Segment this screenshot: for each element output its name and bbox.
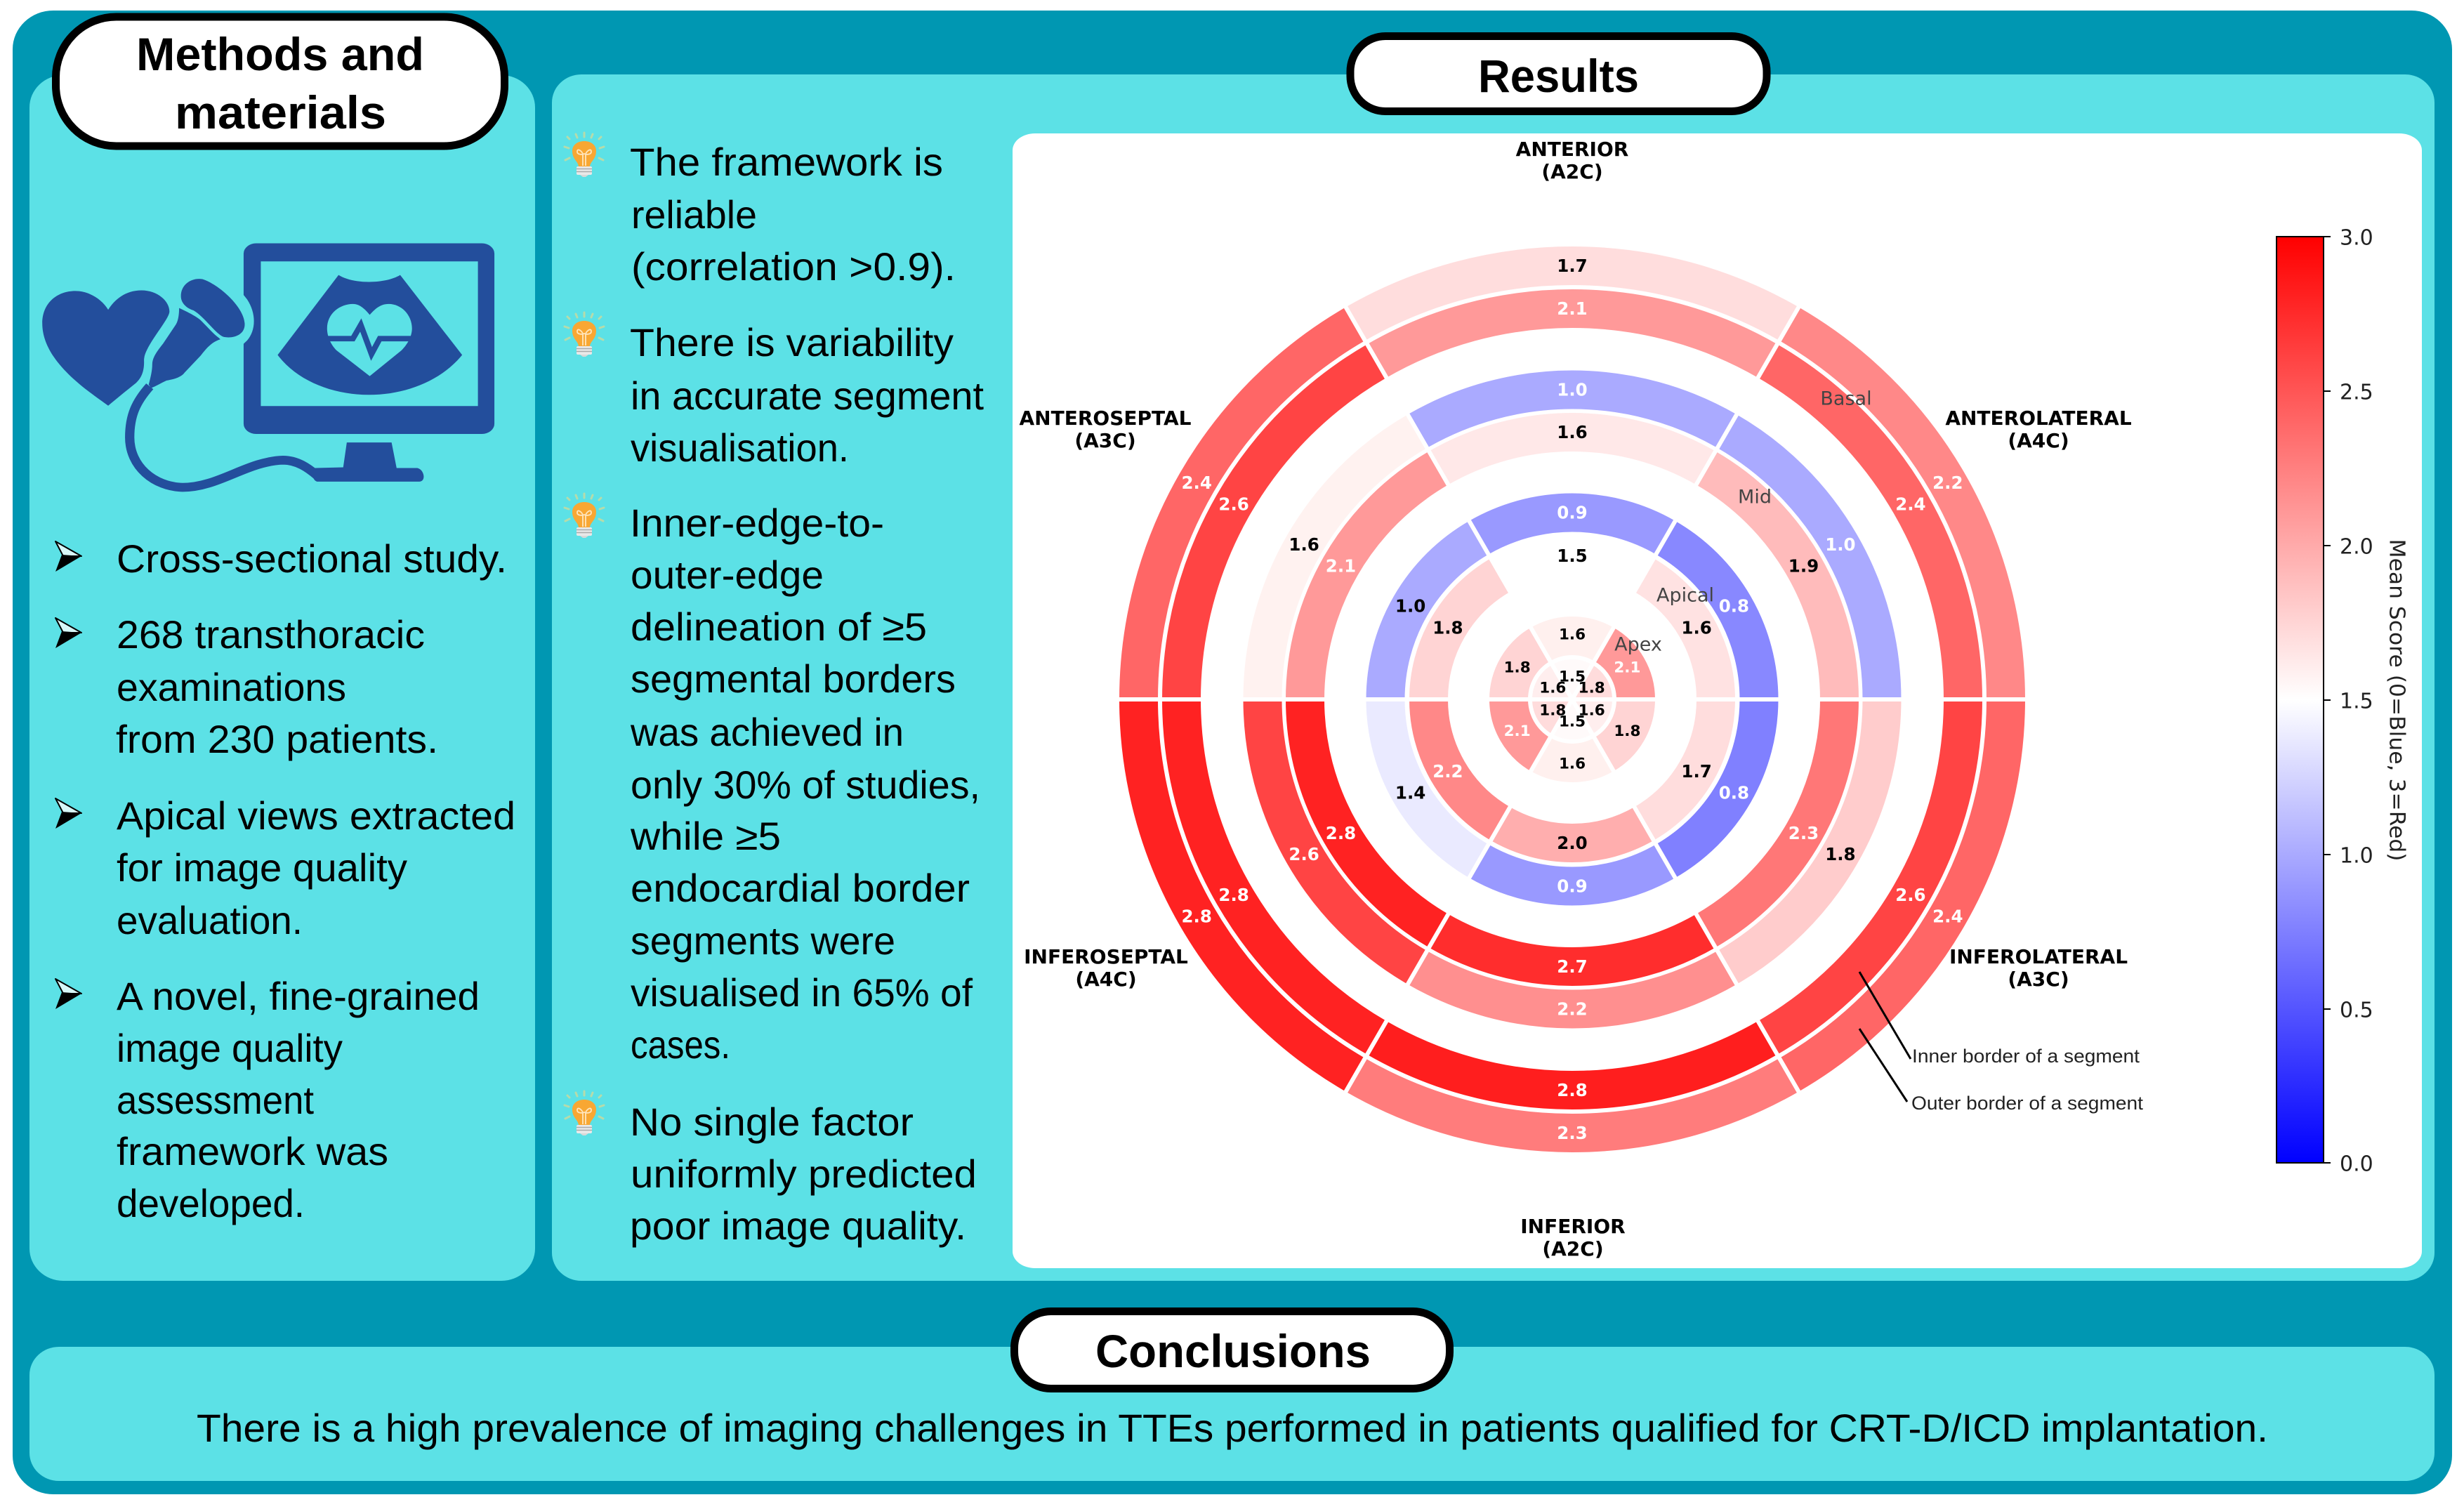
label: anterior: (A2C) [1541,160,1603,183]
text block: delineation finding: outer-edge [631,553,824,597]
text block: delineation finding: endocardial border [631,866,970,910]
ring: mid outer border [1227,390,1918,1009]
values: basal segments: 2.4 [1895,494,1926,514]
values: apical segments: 1.6 [1681,617,1712,638]
values: mid segments: 2.2 [1557,999,1588,1020]
values: apical segments [1395,503,1749,896]
panel: methods and materials [29,17,535,1281]
label: anteroseptal: ANTEROSEPTAL [1020,407,1192,430]
values: apex segments: 1.6 [1559,626,1586,643]
callout: inner border of a segment: Inner border of a segment [1912,1046,2140,1067]
label: inferoseptal: INFEROSEPTAL [1024,945,1188,968]
values: apical segments: 0.9 [1557,503,1588,522]
values: mid segments: 2.7 [1557,956,1588,977]
values: apex segments: 1.5 [1559,668,1586,685]
values: apical segments: 1.7 [1681,761,1712,782]
label: anterior: ANTERIOR [1516,138,1628,161]
label: basal: Basal [1820,388,1872,410]
label: anteroseptal: (A3C) [1074,429,1136,452]
label: inferolateral: INFEROLATERAL [1949,945,2128,968]
values: apical segments: 1.5 [1557,546,1588,566]
bullet: examinations: examinations [117,665,346,709]
callout: outer border of a segment [1859,1029,2144,1114]
label: inferior [1520,1215,1626,1260]
panel: results [552,37,2435,1281]
values: apex segments: 1.6 [1579,702,1605,719]
text block: reliability finding: reliable [631,192,757,237]
text block: delineation finding: while ≥5 [630,814,781,858]
colorbar legend: 2.0 [2340,535,2373,559]
label: apical: Apical [1656,584,1714,607]
values: apex segments: 2.1 [1614,659,1640,676]
values: mid segments: 2.1 [1326,555,1356,576]
values: basal segments [1181,256,1963,1143]
values: apical segments: 0.8 [1719,782,1749,803]
values: basal segments: 2.8 [1218,885,1249,905]
values: basal segments: 2.4 [1181,473,1212,493]
colorbar legend: 1.5 [2340,690,2373,713]
text block: delineation finding: Inner-edge-to- [630,501,884,545]
colorbar legend: 2.5 [2340,381,2373,404]
callout: inner border of a segment [1859,972,2140,1067]
values: apex segments: 1.8 [1614,723,1640,740]
colorbar legend: 0.0 [2340,1152,2373,1177]
text block: predictor finding: No single factor [630,1100,914,1144]
label: inferolateral [1949,945,2128,991]
label: inferoseptal: (A4C) [1075,968,1137,991]
values: mid segments: 1.8 [1825,844,1856,864]
values: apex segments: 2.1 [1504,723,1531,740]
bullet: novel framework: image quality [117,1026,343,1070]
bullet: apical views: for image quality [117,845,407,890]
colorbar legend: 0.5 [2340,999,2373,1022]
values: apex segments: 1.6 [1539,680,1566,697]
label: inferior: (A2C) [1542,1237,1604,1260]
text block: variability finding: visualisation. [631,426,849,470]
values: mid segments: 2.6 [1289,844,1319,864]
bullet: novel framework: developed. [117,1181,305,1225]
heading: results [1350,37,1767,111]
values: mid segments: 2.3 [1788,823,1819,843]
heading: conclusions [1014,1312,1449,1389]
bullet: apical views: evaluation. [117,898,303,942]
panel: conclusions [29,1312,2435,1481]
values: mid segments: 1.9 [1788,555,1819,576]
label: anterior [1516,138,1628,183]
values: apex segments: 1.8 [1579,680,1605,697]
values: basal segments: 2.6 [1218,494,1249,514]
values: apical segments: 1.8 [1432,617,1463,638]
label: inferolateral: (A3C) [2008,968,2069,991]
values: apex segments: 1.5 [1559,713,1586,730]
text block: delineation finding: only 30% of studies, [631,763,980,807]
colorbar axis title: Mean Score (0=Blue, 3=Red) [2385,539,2409,861]
ring: basal inner border [1136,309,2008,1090]
text block: conclusion statement: There is a high prevalence of imaging challenges in TTEs performed in patients qualified for CRT-D/ICD implantation. [197,1406,2268,1450]
bullet: novel framework [55,974,480,1225]
values: apical segments: 1.0 [1395,595,1425,617]
bullet: novel framework: A novel, fine-grained [117,974,480,1018]
ring: apical inner border [1412,556,1732,843]
bullet: examinations: 268 transthoracic [117,612,425,657]
values: basal segments: 2.3 [1557,1123,1588,1143]
text block: reliability finding: The framework is [630,140,943,184]
heading: conclusions: Conclusions [1095,1325,1371,1377]
values: mid segments: 2.8 [1326,823,1356,843]
label: anterolateral: ANTEROLATERAL [1945,407,2132,430]
text block: delineation finding: was achieved in [630,710,904,754]
label: anterolateral: (A4C) [2008,429,2069,452]
text block: methods bullets [55,536,515,1225]
text block: variability finding: in accurate segment [631,374,984,418]
label: inferoseptal [1024,945,1188,991]
colorbar legend [2277,226,2409,1177]
text block: delineation finding: segmental borders [631,657,956,701]
heading: results: Results [1478,50,1639,102]
text block: delineation finding: cases. [631,1022,730,1067]
text block: predictor finding: uniformly predicted [631,1152,977,1196]
text block: delineation finding: delineation of ≥5 [631,605,927,649]
text block: predictor finding [565,1091,977,1248]
values: mid segments: 1.6 [1289,534,1319,555]
text block: variability finding [565,312,984,470]
colorbar legend: 1.0 [2340,844,2373,868]
heading: methods and materials [56,17,504,146]
values: apical segments: 2.2 [1432,761,1463,782]
icon: heart ultrasound probe and monitor [42,244,494,487]
values: apex segments [1504,626,1640,772]
values: mid segments: 1.0 [1557,379,1588,400]
values: apical segments: 0.8 [1719,595,1749,617]
values: basal segments: 2.8 [1181,906,1212,926]
ring: basal outer border [1088,266,2056,1133]
ring: apical outer border [1364,513,1781,886]
values: apex segments: 1.6 [1559,756,1586,772]
ring: apex outer border [1501,636,1643,763]
values: basal segments: 1.7 [1557,256,1588,276]
values: mid segments: 1.0 [1825,534,1856,555]
bullet: novel framework: assessment [117,1078,314,1122]
values: apex segments: 1.8 [1504,659,1531,676]
values: apical segments: 0.9 [1557,876,1588,896]
values: mid segments [1289,379,1856,1020]
label: inferior: INFERIOR [1520,1215,1626,1238]
values: apex segments: 1.8 [1539,702,1566,719]
values: basal segments: 2.8 [1557,1080,1588,1100]
callout: outer border of a segment: Outer border of a segment [1911,1093,2144,1114]
label: anterolateral [1945,407,2132,452]
ring: mid inner border [1274,433,1871,966]
values: basal segments: 2.2 [1932,473,1963,493]
chart: segmental bullseye [1088,256,2056,1143]
label: apex: Apex [1614,633,1662,656]
bullet: novel framework: framework was [117,1129,388,1173]
values: basal segments: 2.6 [1895,885,1926,905]
ring: apex inner border [1550,680,1595,719]
heading: methods and materials: Methods and [136,28,424,80]
text block: delineation finding [565,494,980,1067]
values: apical segments: 2.0 [1557,833,1588,853]
text block: reliability finding [565,133,956,289]
values: basal segments: 2.1 [1557,298,1588,319]
label: anteroseptal [1020,407,1192,452]
bullet: examinations: from 230 patients. [116,717,438,761]
bullet: cross-sectional study: Cross-sectional study. [117,536,507,581]
bullet: apical views: Apical views extracted [117,793,515,838]
text block: delineation finding: visualised in 65% of [631,970,973,1015]
values: apical segments: 1.4 [1395,782,1425,803]
values: mid segments: 1.6 [1557,422,1588,442]
heading: methods and materials: materials [175,86,386,138]
label: mid: Mid [1738,486,1772,508]
text block: predictor finding: poor image quality. [630,1204,966,1248]
panel: bullseye chart [1013,133,2422,1268]
values: basal segments: 2.4 [1932,906,1963,926]
bullet: examinations [55,612,438,761]
text block: reliability finding: (correlation >0.9). [631,244,956,289]
colorbar legend: 3.0 [2340,226,2373,250]
bullet: apical views [55,793,515,942]
text block: variability finding: There is variability [630,320,954,364]
text block: delineation finding: segments were [631,918,895,963]
